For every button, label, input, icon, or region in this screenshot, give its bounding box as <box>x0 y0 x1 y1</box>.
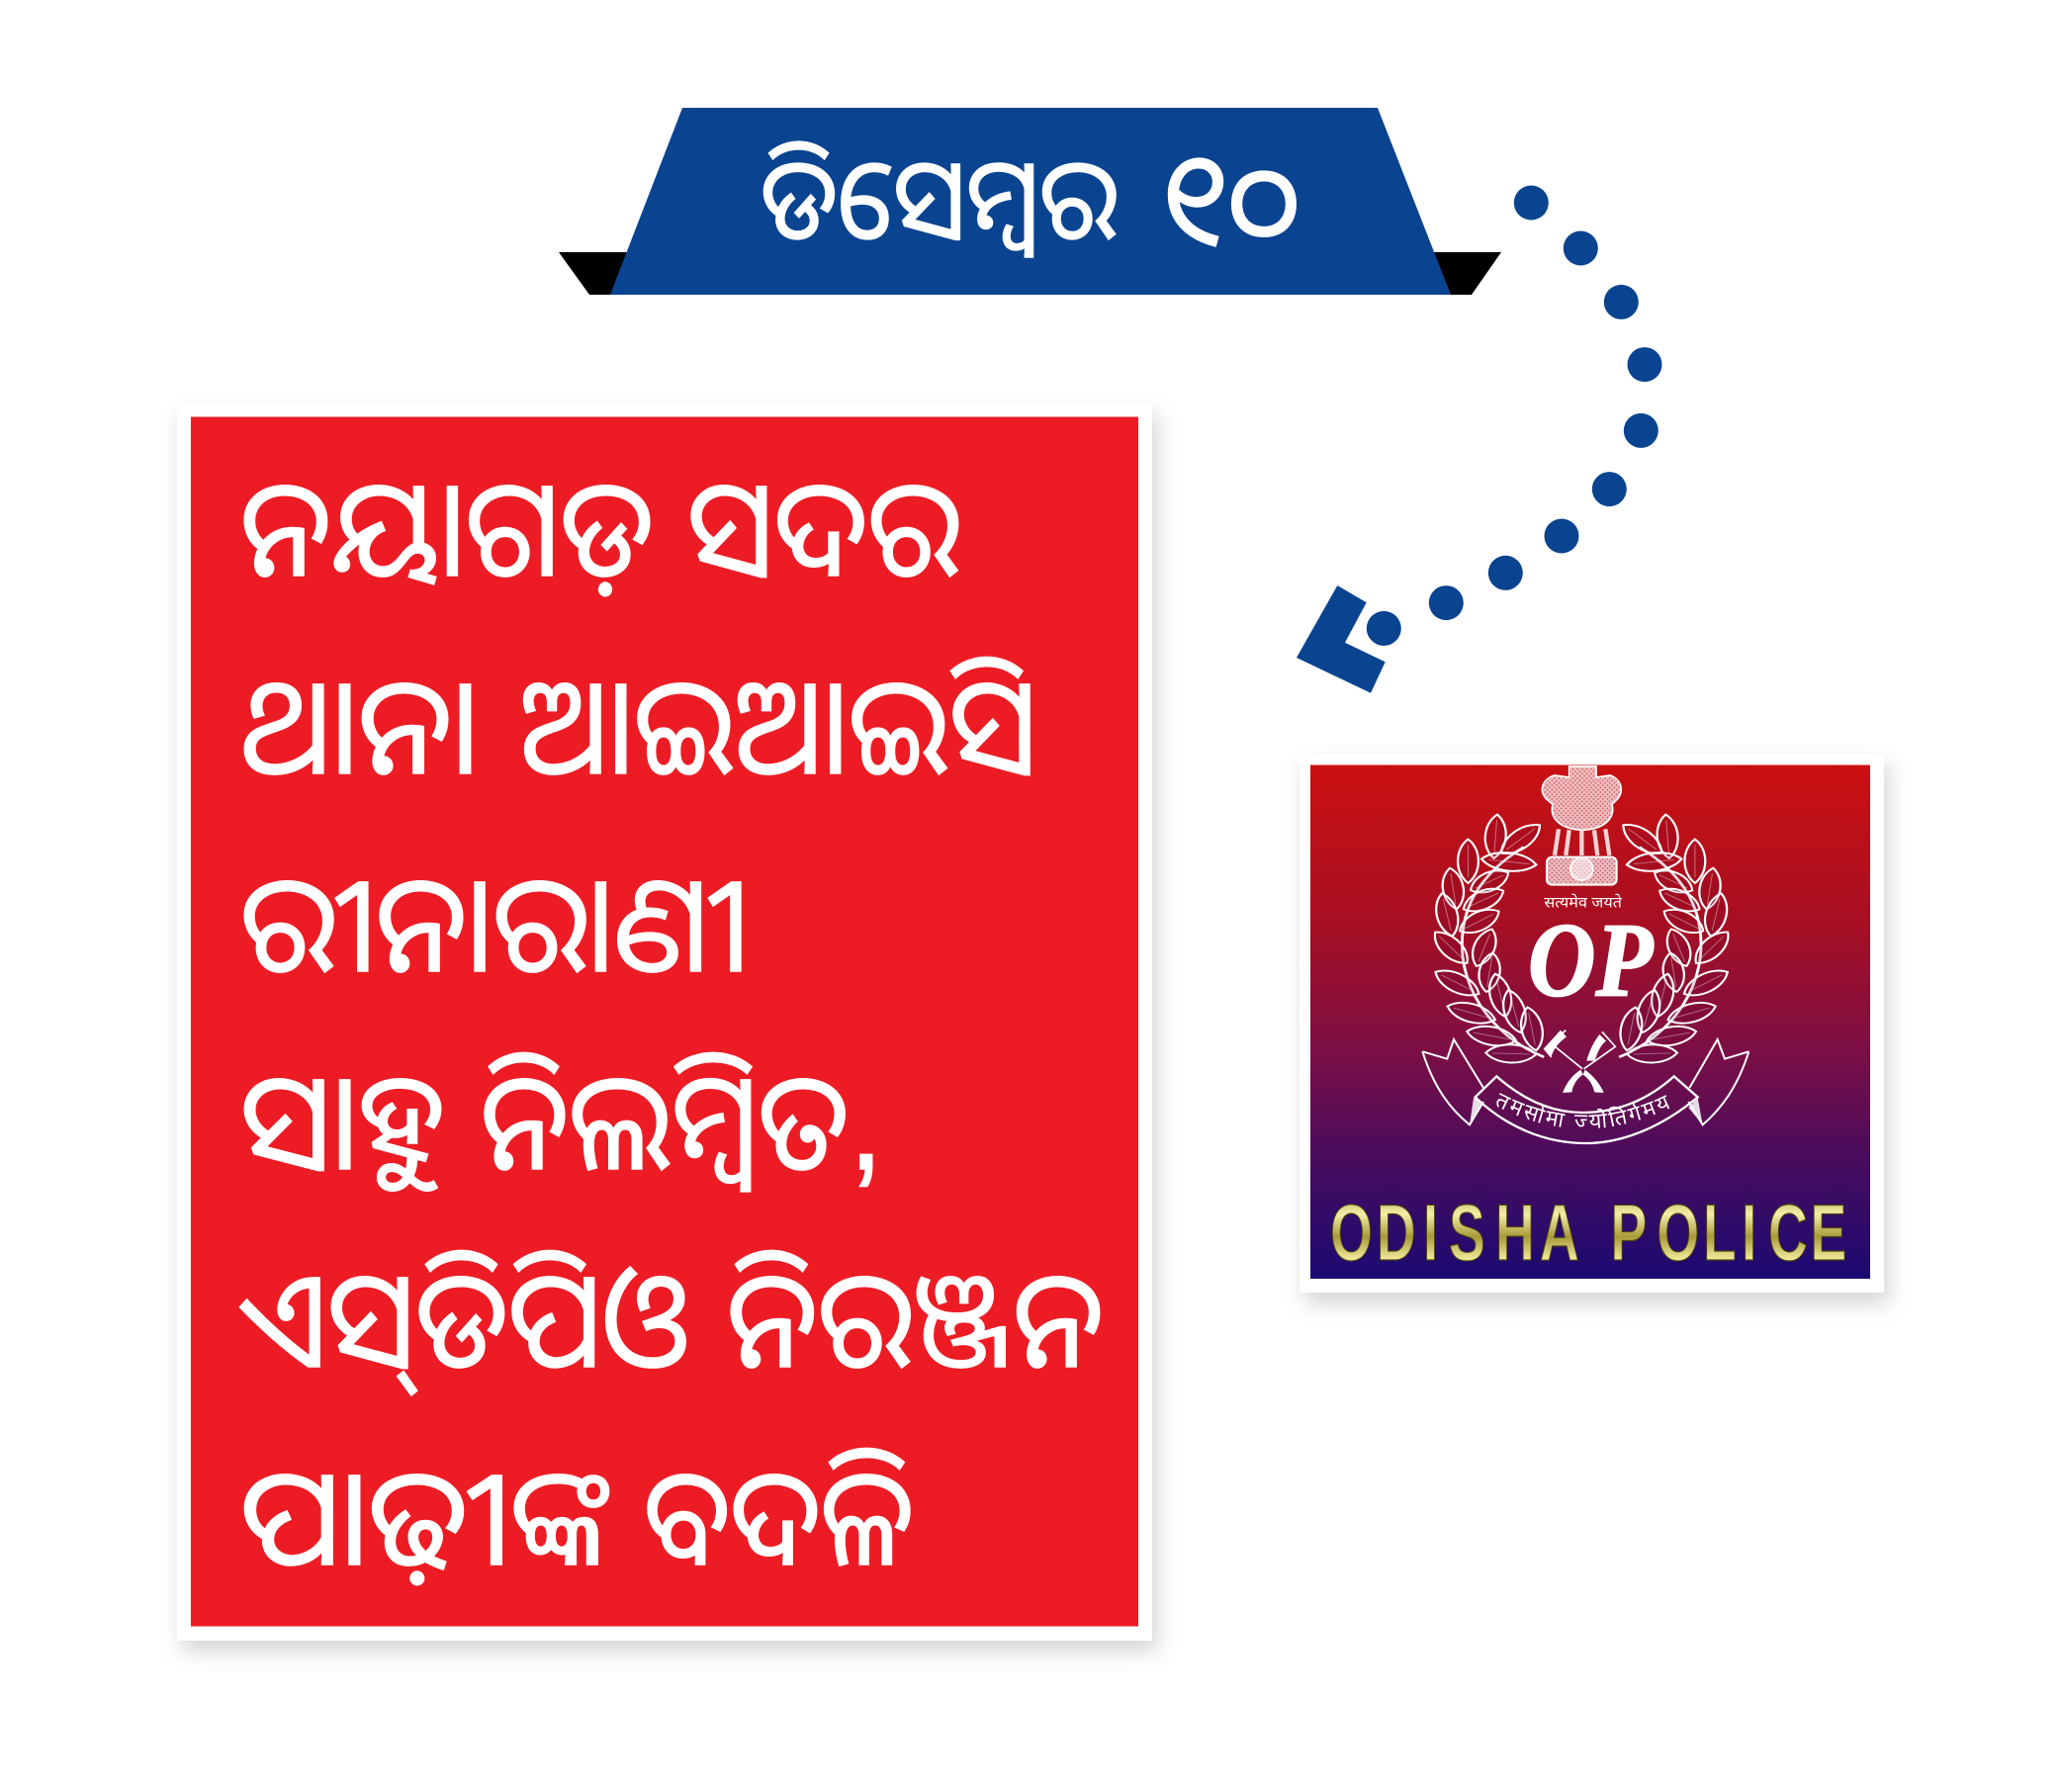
card red background <box>191 417 1138 1626</box>
headline text: ରୀନାରାଣୀ <box>240 850 749 1001</box>
banner trapezoid <box>610 108 1451 295</box>
panel: Odisha Police logo photo <box>1296 759 1898 1312</box>
date banner <box>559 108 1501 295</box>
card white frame with shadow <box>177 403 1152 1641</box>
left laurel wreath <box>1428 814 1547 1063</box>
headline text: ଏସ୍‌ଡିପିଓ <box>239 1245 690 1396</box>
headline text: ନିରଞ୍ଜନ <box>727 1245 1104 1396</box>
headline text: ଆଇଆଇସି <box>520 652 1037 803</box>
headline text: ସଦର <box>687 454 960 605</box>
capital legs <box>1555 829 1609 855</box>
headline text <box>239 454 1104 1594</box>
logo gradient background <box>1310 765 1870 1279</box>
national emblem <box>1542 766 1622 911</box>
headline text: ନିଲମ୍ବିତ, <box>481 1047 883 1199</box>
bow loops <box>1544 1030 1615 1093</box>
headline text: ପାଢ଼ୀଙ୍କ <box>240 1443 610 1594</box>
OP monogram: OP <box>1528 901 1654 1019</box>
lion capital <box>1542 766 1621 830</box>
banner right black fold <box>1429 252 1501 295</box>
capital base with wheel <box>1547 857 1617 885</box>
motto ribbon with bow <box>1421 1030 1750 1145</box>
banner date text: ୧୦ <box>1160 128 1299 273</box>
right laurel wreath <box>1617 814 1736 1063</box>
banner date text: ଡିସେମ୍ବର <box>761 137 1118 263</box>
panel: red headline card <box>177 403 1152 1641</box>
emblem motto: सत्यमेव जयते <box>1544 892 1622 911</box>
arrowhead <box>1297 585 1386 693</box>
banner date text <box>761 128 1299 273</box>
headline text: ନୟାଗଡ଼ <box>240 454 654 605</box>
logo white frame with shadow <box>1299 754 1884 1293</box>
dotted curved arrow <box>1297 186 1661 693</box>
ribbon motto text: तमसोमा ज्योतिर्गमय <box>1496 1093 1669 1128</box>
headline text: ଥାନା <box>240 652 479 803</box>
ribbon fold highlights <box>1470 1098 1484 1124</box>
logo wreath and monogram <box>1428 814 1736 1063</box>
ribbon outlines <box>1422 1039 1748 1143</box>
headline text: ବଦଳି <box>644 1443 914 1594</box>
headline text: ସାହୁ <box>240 1047 445 1199</box>
ODISHA POLICE wordmark: ODISHA POLICE <box>1330 1187 1846 1278</box>
banner left black fold <box>559 252 633 295</box>
